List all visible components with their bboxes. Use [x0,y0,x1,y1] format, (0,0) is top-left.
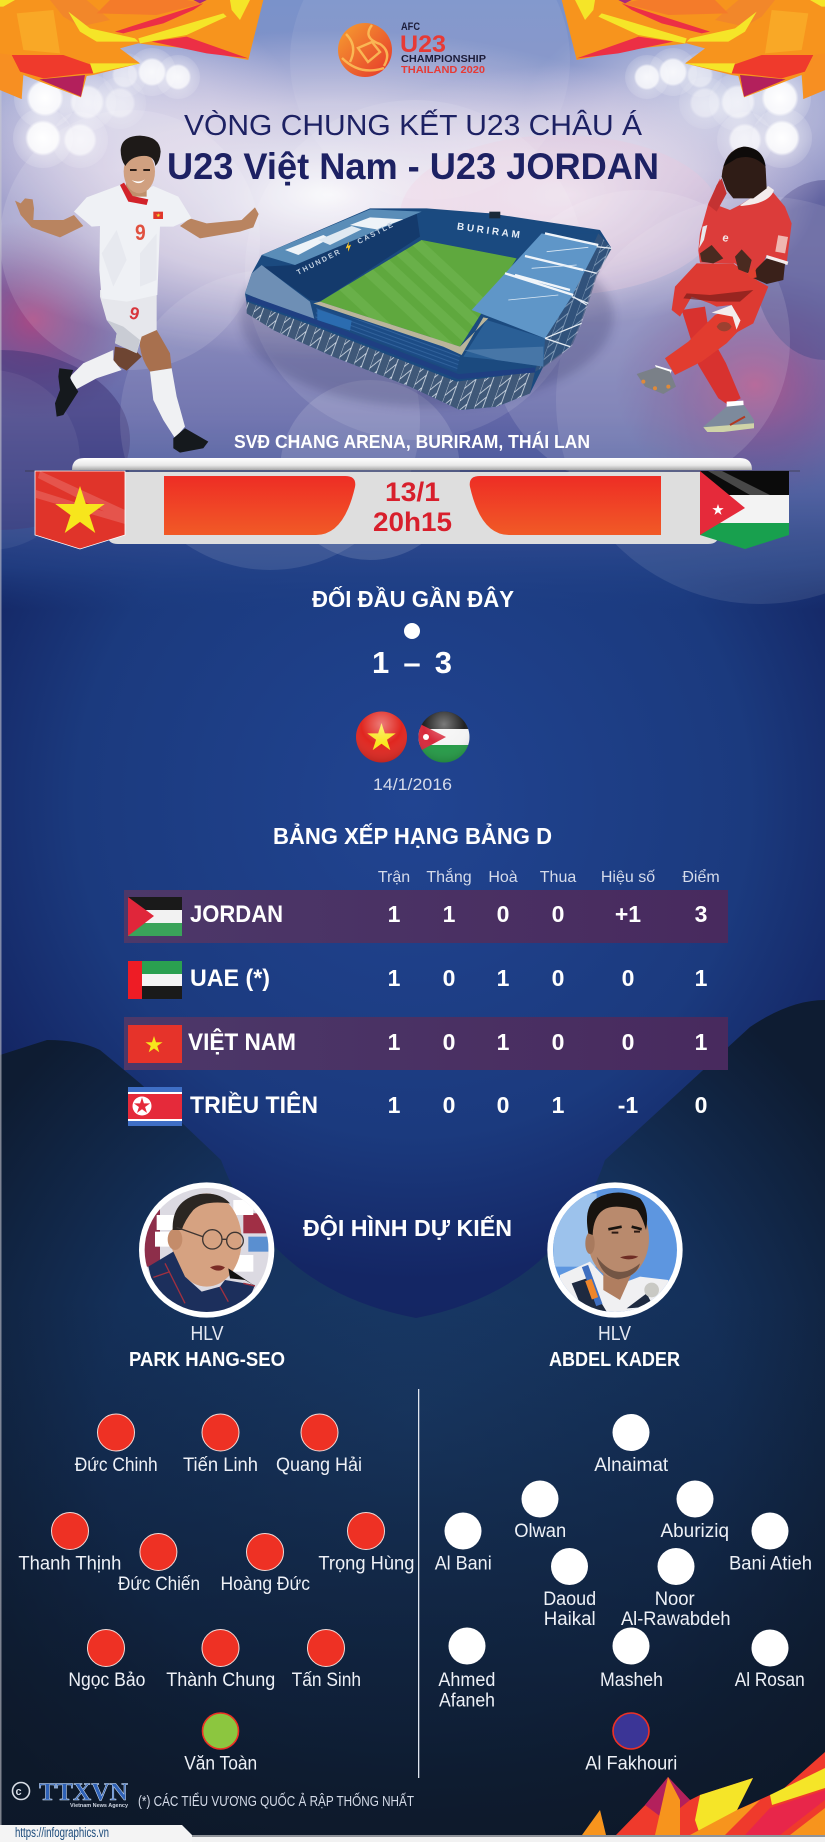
player: Ngọc Bảo: Ngọc Bảo [68,1670,145,1691]
player: Văn Toàn (goalkeeper): Văn Toàn [184,1754,257,1774]
heading: expected lineup: ĐỘI HÌNH DỰ KIẾN [303,1214,512,1241]
player: Daoud Haikal [543,1548,596,1630]
heading: head to head: ĐỐI ĐẦU GẦN ĐÂY [312,585,514,612]
copyright logo TTXVN [12,1779,129,1809]
icon: ball dot [404,623,420,639]
player: Ngọc Bảo [68,1630,145,1691]
player: Quang Hải [276,1414,362,1476]
match date: 14/1/2016 [373,776,452,794]
decoration: flame top right [562,0,825,99]
coach label: Park Hang-seo: HLV [190,1323,224,1345]
player: Alnaimat: Alnaimat [594,1455,669,1476]
player: Ahmed Afaneh [438,1628,495,1712]
title line 2: U23 Việt Nam - U23 JORDAN [167,146,659,187]
row: Viet Nam: 1 [695,1029,708,1055]
title line 1: VÒNG CHUNG KẾT U23 CHÂU Á [184,108,643,142]
stadium: BURIRAM [456,221,520,241]
row: North Korea: 1 [552,1092,565,1118]
player: Al Fakhouri (goalkeeper): Al Fakhouri [585,1754,677,1774]
player: Tiến Linh: Tiến Linh [183,1455,258,1476]
player: Hoàng Đức: Hoàng Đức [220,1574,310,1595]
player: Thanh Thịnh [18,1512,121,1574]
flag: Jordan pennant [700,471,789,549]
divider [418,1389,419,1778]
coach label: Park Hang-seo [129,1323,285,1371]
player: Bani Atieh: Bani Atieh [729,1554,812,1574]
stadium lights right [625,48,812,168]
player: Bani Atieh [729,1512,812,1574]
row: UAE: 1 [497,965,510,991]
row: Viet Nam: 0 [622,1029,634,1055]
decoration: flame top left [0,0,263,99]
copyright logo TTXVN: Vietnam News Agency [70,1803,129,1809]
row: Jordan: 1 [443,901,456,927]
icon: Vietnam sphere [356,712,407,762]
player: Đức Chinh [75,1414,158,1476]
date and time: 13/1 [385,477,440,507]
table header [378,867,720,886]
player: Al Rosan: Al Rosan [735,1670,805,1691]
coach label: Abdel Kader: ABDEL KADER [549,1349,680,1371]
table header: Điểm [682,868,720,886]
player: Quang Hải: Quang Hải [276,1455,362,1476]
row: UAE: 0 [443,965,455,991]
icon: Jordan sphere [418,711,470,763]
footnote: (*) CÁC TIỂU VƯƠNG QUỐC Ả RẬP THỐNG NHẤT [138,1792,414,1810]
player: Al Bani [435,1512,492,1574]
row: North Korea: -1 [618,1092,638,1118]
table header: Thua [540,869,576,886]
row: North Korea: 0 [497,1092,509,1118]
player: Trọng Hùng: Trọng Hùng [318,1554,414,1574]
player: Thanh Thịnh: Thanh Thịnh [18,1554,121,1574]
logo: AFC U23 Championship [338,21,486,77]
row: Viet Nam: 1 [388,1029,401,1055]
player: Noor Al-Rawabdeh: Al-Rawabdeh [621,1609,730,1630]
player: Aburiziq [660,1480,729,1542]
bottom strip [0,1825,825,1842]
player: Noor Al-Rawabdeh: Noor [655,1589,695,1610]
row: Viet Nam [124,1017,728,1070]
row: Jordan: 1 [388,901,401,927]
player: Ahmed Afaneh: Afaneh [439,1690,495,1712]
player: Olwan [514,1480,566,1542]
row: Viet Nam: 1 [497,1029,510,1055]
row: Jordan: 3 [695,901,707,927]
coach label: Abdel Kader [549,1323,680,1371]
lineup: Vietnam [18,1414,414,1774]
row: North Korea [128,1087,707,1126]
player: Vietnam number 9 [15,136,259,453]
red panel right [470,476,661,535]
player: Alnaimat [594,1414,669,1476]
table header: Trận [378,869,410,886]
row: North Korea: 1 [388,1092,401,1118]
flag: Vietnam pennant [35,471,125,549]
player: Trọng Hùng [318,1512,414,1574]
player: Aburiziq: Aburiziq [660,1521,729,1542]
stadium: THUNDER ⚡ CASTLE [295,220,394,277]
player: Văn Toàn (goalkeeper) [184,1713,257,1774]
player: Đức Chiến [118,1534,200,1595]
player: Olwan: Olwan [514,1521,566,1542]
logo: AFC U23 Championship: U23 [400,31,446,58]
player: Jordan in red: e [721,232,730,245]
row: Viet Nam: 0 [443,1029,455,1055]
table header: Thắng [426,867,472,886]
player: Vietnam number 9: 9 [127,302,142,324]
row: North Korea: 0 [695,1092,707,1118]
row: Jordan: 0 [497,901,509,927]
row: Jordan: JORDAN [190,901,283,928]
decoration: flame bottom right [582,1752,825,1835]
stadium [240,208,613,410]
player: Tiến Linh [183,1414,258,1476]
portrait: Abdel Kader [547,1182,683,1318]
match banner [25,458,800,549]
row: UAE: 0 [622,965,634,991]
row: UAE [128,961,708,999]
score: 1 – 3 [372,645,452,680]
player: Vietnam number 9: 9 [135,220,146,245]
row: UAE: 1 [388,965,401,991]
source url: https://infographics.vn [15,1825,109,1840]
player: Al Fakhouri (goalkeeper) [585,1713,677,1774]
player: Al Rosan [735,1630,805,1691]
row: UAE: UAE (*) [190,965,270,992]
stadium lights left [13,48,200,168]
player: Jordan in red [637,147,792,432]
coach label: Park Hang-seo: PARK HANG-SEO [129,1349,285,1371]
table: group D standings [124,867,728,1126]
table header: Hiệu số [601,869,655,886]
player: Thành Chung [166,1630,275,1691]
player: Masheh: Masheh [600,1670,663,1691]
player: Đức Chiến: Đức Chiến [118,1574,200,1595]
row: Viet Nam: VIỆT NAM [188,1028,296,1056]
player: Đức Chinh: Đức Chinh [75,1455,158,1476]
venue label: SVĐ CHANG ARENA, BURIRAM, THÁI LAN [234,431,590,452]
logo: AFC U23 Championship: THAILAND 2020 [401,64,485,76]
heading: group table: BẢNG XẾP HẠNG BẢNG D [273,821,552,849]
row: UAE: 0 [552,965,564,991]
table header: Hoà [488,869,518,886]
lineup: Jordan [435,1414,812,1774]
logo: AFC U23 Championship: CHAMPIONSHIP [401,54,486,65]
row: North Korea: TRIỀU TIÊN [190,1091,318,1119]
match banner: 20h15 [373,507,452,537]
player: Tấn Sinh: Tấn Sinh [292,1670,361,1691]
player: Tấn Sinh [292,1630,361,1691]
player: Daoud Haikal: Daoud [543,1589,596,1610]
red panel left [164,476,355,535]
player: Thành Chung: Thành Chung [166,1670,275,1691]
portrait: Park Hang-seo [139,1182,274,1318]
player: Al Bani: Al Bani [435,1554,492,1574]
player: Daoud Haikal: Haikal [544,1609,596,1630]
copyright logo TTXVN: c [16,1786,22,1798]
row: Viet Nam: 0 [552,1029,564,1055]
player: Ahmed Afaneh: Ahmed [438,1670,495,1691]
copyright logo TTXVN: TTXVN [39,1779,128,1806]
player: Noor Al-Rawabdeh [621,1548,730,1630]
row: UAE: 1 [695,965,708,991]
player: Masheh [600,1628,663,1691]
coach label: Abdel Kader: HLV [598,1323,632,1345]
player: Hoàng Đức [220,1534,310,1595]
row: Jordan: 0 [552,901,564,927]
logo: AFC U23 Championship: AFC [401,21,420,33]
row: Jordan [124,890,728,943]
row: North Korea: 0 [443,1092,455,1118]
row: Jordan: +1 [615,901,641,927]
